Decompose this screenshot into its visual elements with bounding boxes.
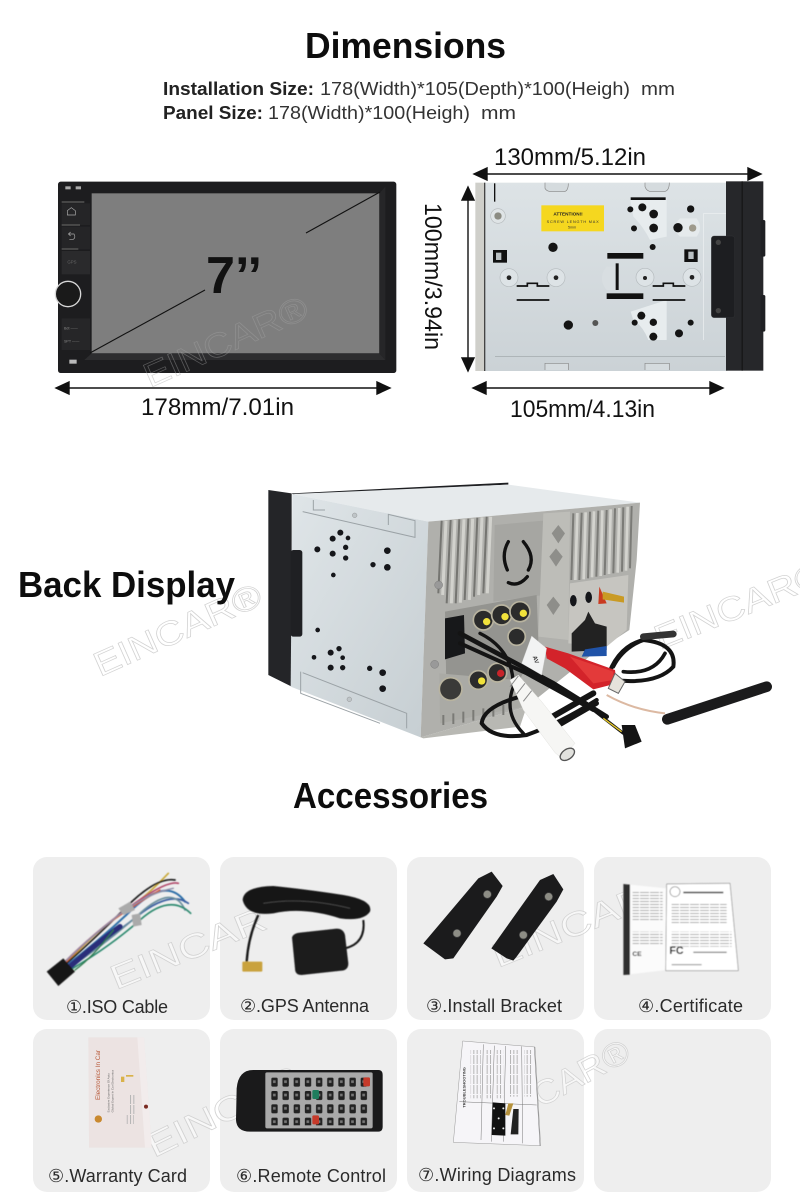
installation size line: mm (641, 79, 675, 99)
arrow: 130mm length (474, 168, 761, 180)
arrow: 105mm depth (473, 382, 723, 394)
title: Dimensions: Dimensions (305, 25, 506, 66)
card 8 empty (594, 1029, 771, 1192)
card 1 background (33, 857, 210, 1020)
head unit front view with 7 inch screen: SPT —— (64, 339, 80, 343)
left fins (438, 517, 487, 603)
card 7 background (407, 1029, 584, 1192)
cable tag (522, 636, 547, 675)
panel size line (163, 103, 516, 123)
installation size line: 178(Width)*105(Depth)*100(Heigh) (320, 79, 630, 99)
accessory: wiring diagrams (453, 1041, 541, 1146)
watermark row 1 right: EINCAR (487, 878, 654, 975)
watermark row 1 left: EINCAR (105, 900, 272, 997)
watermark row 2 right: CAR® (526, 1032, 636, 1115)
panel size line: mm (481, 103, 516, 123)
caption 3: ③.Install Bracket (426, 996, 562, 1016)
card 6 background (220, 1029, 397, 1192)
watermark row 2 left: EINCAR (141, 1059, 306, 1165)
cables (460, 633, 674, 736)
card 3 background (407, 857, 584, 1020)
antenna port (598, 587, 624, 604)
back view of unit with cables: AV (531, 655, 539, 665)
accessory: install brackets (423, 872, 563, 961)
heading: Back Display: Back Display (18, 564, 235, 605)
attention sticker: ATTENTION!! (553, 212, 583, 217)
white RCA plug (510, 675, 577, 763)
accessory: certificate: CE (632, 951, 642, 958)
caption 7: ⑦.Wiring Diagrams (418, 1165, 576, 1185)
heading: Accessories: Accessories (293, 775, 488, 816)
right fins (571, 506, 632, 580)
accessory: GPS antenna (242, 886, 370, 975)
arrow: 100mm height (462, 187, 474, 371)
caption 2: ②.GPS Antenna (240, 996, 370, 1016)
antenna (607, 695, 665, 713)
watermark left of back view: EINCAR® (88, 576, 268, 684)
watermark on head unit: EINCAR® (138, 289, 314, 395)
installation size line: Installation Size: (163, 79, 314, 99)
centre plate and fan (493, 521, 543, 602)
attention sticker: 5mm (568, 226, 576, 230)
attention sticker (541, 205, 604, 231)
accessory: warranty card: Electronics In Car (95, 1050, 102, 1100)
caption 6: ⑥.Remote Control (236, 1166, 386, 1186)
panel size line: Panel Size: (163, 103, 263, 123)
screen diagonal line (90, 192, 380, 353)
accessory: wiring diagrams: TROUBLESHOOTING (461, 1067, 466, 1108)
accessory: ISO cable (47, 873, 191, 986)
caption 1: ①.ISO Cable (66, 997, 168, 1017)
attention sticker: SCREW LENGTH MAX (547, 220, 599, 224)
accessory: warranty card: Exclusive Experience Of Auto (106, 1073, 110, 1112)
head unit front view with 7 inch screen (55, 182, 396, 373)
caption 5: ⑤.Warranty Card (48, 1166, 187, 1186)
lower left port panel (445, 595, 538, 707)
accessory: certificate (623, 883, 738, 975)
installation size line (163, 79, 675, 99)
watermark centre of back view: EINCAR® (374, 558, 555, 663)
card 5 background (33, 1029, 210, 1192)
card 4 background (594, 857, 771, 1020)
head unit front view with 7 inch screen: Bdt —— (64, 327, 78, 331)
head unit side view chassis (475, 181, 765, 371)
label: 130mm: 130mm/5.12in (494, 144, 646, 171)
accessory: warranty card: Global Expert In Car Electronics (111, 1069, 115, 1112)
RCA ports (439, 602, 530, 700)
small connector (622, 725, 642, 748)
label: 105mm: 105mm/4.13in (510, 396, 655, 423)
diamond strip (538, 512, 570, 640)
accessory: remote control (236, 1070, 383, 1132)
caption 4: ④.Certificate (638, 996, 743, 1016)
card 2 background (220, 857, 397, 1020)
accessory: certificate: FC (669, 945, 684, 957)
label: 100mm: 100mm/3.94in (419, 203, 446, 350)
screen size label: 7’’ (206, 247, 262, 305)
head unit front view with 7 inch screen: GPS (67, 260, 77, 265)
red RCA plug (545, 647, 625, 693)
arrow: 178mm width (56, 382, 390, 394)
label: 178mm: 178mm/7.01in (141, 394, 294, 421)
accessory: warranty card (88, 1037, 152, 1148)
back view of unit with cables (268, 483, 767, 763)
panel size line: 178(Width)*100(Heigh) (268, 103, 470, 123)
